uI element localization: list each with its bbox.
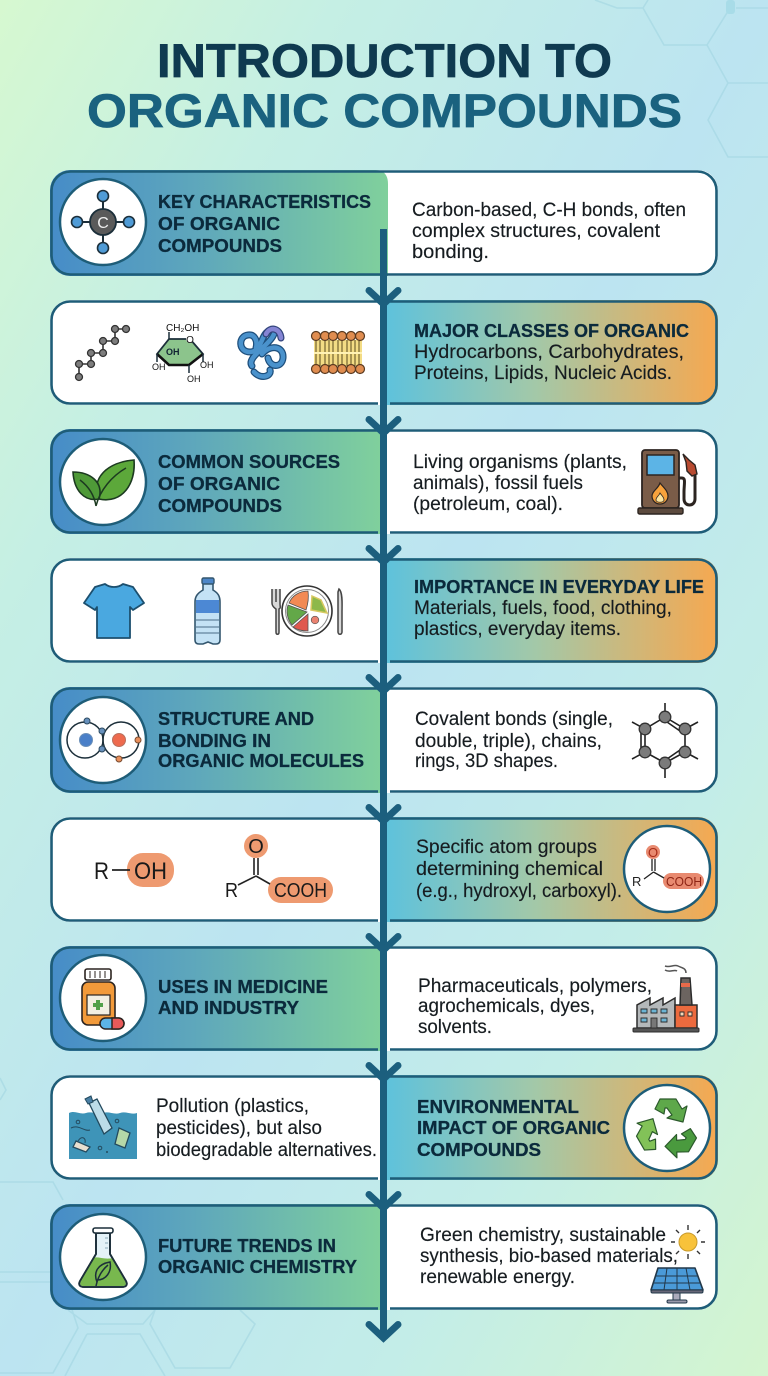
- text: common sources: (petroleum, coal).: [413, 494, 563, 515]
- title: [87, 34, 682, 137]
- panel: importance in everyday life: [50, 558, 718, 663]
- icon: lipid bilayer: [312, 332, 364, 374]
- heading: structure and bonding: ORGANIC MOLECULES: [158, 750, 364, 771]
- text: importance in everyday life: plastics, everyday items.: [414, 619, 621, 640]
- icon: glucose ring: OH: [152, 362, 166, 372]
- heading: structure and bonding: [158, 708, 364, 771]
- icon: glucose ring: CH₂OH: [166, 323, 199, 334]
- text: major classes: [414, 320, 689, 384]
- icon: sun and solar panel: [651, 1225, 705, 1303]
- icon: carbon atom: [60, 179, 146, 265]
- text: medicine and industry: solvents.: [418, 1017, 492, 1038]
- icon: glucose ring: OH: [187, 374, 200, 384]
- panel: medicine and industry: [50, 946, 718, 1051]
- icon: glucose ring: OH: [166, 347, 180, 357]
- text: environmental impact: Pollution (plastics,: [156, 1096, 309, 1117]
- panel: future trends: [50, 1204, 718, 1310]
- icon: ocean pollution: [69, 1096, 137, 1159]
- text: functional groups: Specific atom groups: [416, 837, 597, 858]
- icon: glucose ring: OH: [200, 360, 214, 370]
- panel: common sources: [50, 429, 718, 534]
- icon: carboxyl group: R: [225, 880, 238, 902]
- heading: structure and bonding: STRUCTURE AND: [158, 708, 314, 729]
- heading: structure and bonding: BONDING IN: [158, 730, 271, 751]
- panel: structure and bonding: [50, 687, 718, 793]
- text: key characteristics: Carbon-based, C-H bonds, often: [412, 200, 686, 221]
- icon: hydroxyl group: R: [94, 858, 109, 885]
- heading: environmental impact: IMPACT OF ORGANIC: [417, 1117, 610, 1138]
- text: major classes: Proteins, Lipids, Nucleic Acids.: [414, 363, 672, 384]
- icon: carboxyl group: COOH: [274, 880, 327, 902]
- icon: glucose ring: [152, 323, 214, 384]
- heading: environmental impact: ENVIRONMENTAL: [417, 1096, 579, 1117]
- text: medicine and industry: Pharmaceuticals, polymers,: [418, 976, 652, 997]
- heading: environmental impact: COMPOUNDS: [417, 1139, 541, 1160]
- icon: carboxyl badge: O: [648, 845, 658, 860]
- icon: atom orbitals: [60, 697, 146, 783]
- icon: carboxyl group: O: [248, 836, 264, 858]
- heading: key characteristics: KEY CHARACTERISTICS: [158, 191, 371, 212]
- text: structure and bonding: [415, 709, 613, 772]
- icon: leaves: [60, 439, 146, 525]
- text: future trends: [420, 1225, 678, 1288]
- icon: factory: [633, 965, 699, 1032]
- text: environmental impact: biodegradable alternatives.: [156, 1140, 377, 1161]
- text: medicine and industry: [418, 976, 652, 1038]
- heading: medicine and industry: [158, 976, 328, 1018]
- text: functional groups: [416, 837, 622, 902]
- heading: common sources: COMMON SOURCES: [158, 451, 340, 472]
- text: future trends: renewable energy.: [420, 1267, 575, 1288]
- text: future trends: synthesis, bio-based materials,: [420, 1246, 678, 1267]
- heading: key characteristics: [158, 191, 371, 256]
- icon: carboxyl badge: [624, 826, 710, 912]
- text: key characteristics: [412, 200, 686, 263]
- text: environmental impact: pesticides), but also: [156, 1118, 322, 1139]
- text: environmental impact: [156, 1096, 377, 1161]
- text: structure and bonding: rings, 3D shapes.: [415, 751, 558, 772]
- heading: future trends: ORGANIC CHEMISTRY: [158, 1256, 358, 1277]
- text: functional groups: determining chemical: [416, 859, 603, 880]
- text: future trends: Green chemistry, sustainable: [420, 1225, 666, 1246]
- heading: environmental impact: [417, 1096, 610, 1160]
- icon: t-shirt: [84, 584, 144, 638]
- heading: common sources: OF ORGANIC: [158, 473, 280, 494]
- icon: hydrocarbon chain: [76, 326, 130, 380]
- text: importance in everyday life: IMPORTANCE IN EVERYDAY LIFE: [414, 576, 704, 597]
- text: medicine and industry: agrochemicals, dyes,: [418, 996, 595, 1017]
- title: ORGANIC COMPOUNDS: [87, 84, 682, 137]
- icon: water bottle: [195, 578, 220, 644]
- heading: key characteristics: COMPOUNDS: [158, 235, 282, 256]
- icon: plate and cutlery: [272, 586, 342, 636]
- icon: carbon atom: C: [97, 215, 109, 232]
- panel: key characteristics: [50, 170, 718, 276]
- panel: major classes: [50, 300, 718, 405]
- icon: fuel pump: [638, 450, 697, 514]
- heading: future trends: [158, 1235, 358, 1277]
- icon: green flask: [60, 1214, 146, 1300]
- icon: carboxyl badge: R: [632, 874, 641, 889]
- icon: carboxyl group: [225, 834, 333, 903]
- text: common sources: animals), fossil fuels: [413, 473, 583, 494]
- icon: medicine bottle: [60, 955, 146, 1041]
- icon: hydroxyl group: OH: [134, 858, 167, 885]
- arrow: central flow line: [369, 229, 398, 1338]
- icon: benzene ring: [632, 703, 698, 778]
- heading: medicine and industry: USES IN MEDICINE: [158, 976, 328, 997]
- panel: environmental impact: [50, 1075, 718, 1180]
- text: importance in everyday life: Materials, fuels, food, clothing,: [414, 598, 672, 619]
- icon: glucose ring: O: [186, 335, 194, 346]
- text: key characteristics: complex structures, covalent: [412, 221, 661, 242]
- text: major classes: Hydrocarbons, Carbohydrates,: [414, 342, 684, 363]
- text: key characteristics: bonding.: [412, 242, 489, 263]
- text: importance in everyday life: [414, 576, 704, 640]
- text: major classes: MAJOR CLASSES OF ORGANIC: [414, 320, 689, 341]
- heading: medicine and industry: AND INDUSTRY: [158, 997, 300, 1018]
- heading: key characteristics: OF ORGANIC: [158, 213, 280, 234]
- icon: protein: [241, 329, 283, 376]
- icon: recycling symbol: [624, 1085, 710, 1171]
- icon: hydroxyl group: [94, 853, 174, 887]
- heading: future trends: FUTURE TRENDS IN: [158, 1235, 336, 1256]
- text: functional groups: (e.g., hydroxyl, carboxyl).: [416, 881, 622, 902]
- panel: functional groups: [50, 817, 718, 922]
- heading: common sources: COMPOUNDS: [158, 495, 282, 516]
- title: INTRODUCTION TO: [157, 34, 612, 87]
- heading: common sources: [158, 451, 340, 516]
- icon: carboxyl badge: COOH: [666, 874, 702, 889]
- text: common sources: [413, 452, 627, 515]
- text: common sources: Living organisms (plants,: [413, 452, 627, 473]
- text: structure and bonding: Covalent bonds (single,: [415, 709, 613, 730]
- text: structure and bonding: double, triple), chains,: [415, 731, 602, 752]
